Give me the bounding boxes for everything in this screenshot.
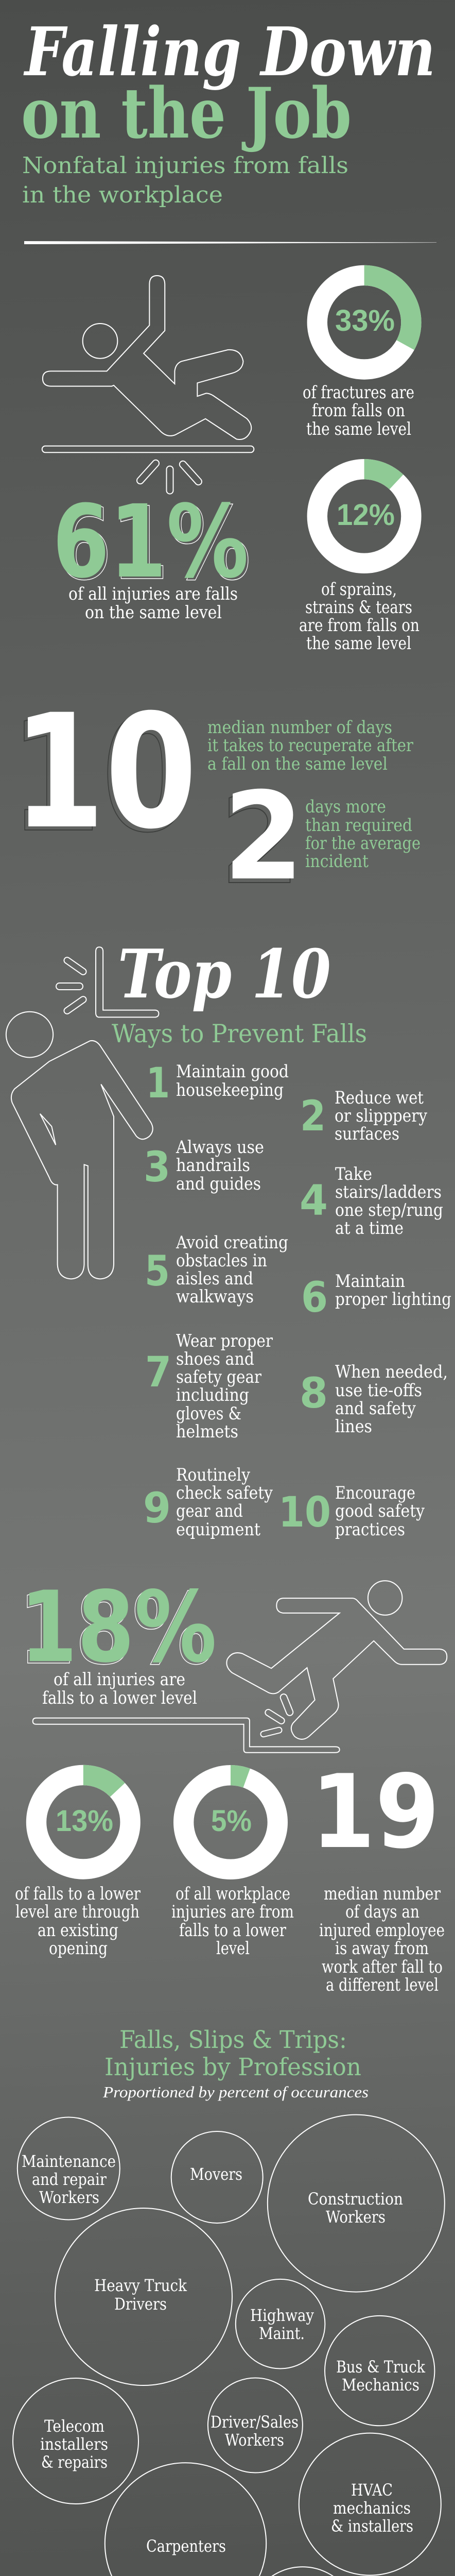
tip 9: 9	[143, 1484, 171, 1533]
tip 3: Always use	[176, 1137, 264, 1158]
tip 6: Maintain	[335, 1271, 405, 1292]
heading: injuries by profession: Falls, Slips & Trips:	[119, 2026, 347, 2054]
icon: head impact ticks	[56, 956, 87, 1015]
bubble: construction: Workers	[326, 2207, 386, 2227]
donut: 33%	[317, 275, 411, 369]
bubble: highway: Highway	[250, 2306, 314, 2325]
tip 10: 10	[278, 1488, 331, 1537]
caption: fractures	[303, 382, 414, 439]
bubble: carpenters: Carpenters	[146, 2536, 226, 2556]
heading: injuries by profession	[104, 2026, 361, 2081]
bubble: telecom: Telecom	[44, 2416, 104, 2436]
bubble: hvac: & installers	[331, 2516, 413, 2536]
bubble: construction: Construction	[308, 2189, 403, 2209]
caption: lower level: of all injuries are	[54, 1669, 185, 1690]
bubble: construction	[268, 2115, 445, 2292]
tip 6: 6	[301, 1274, 328, 1322]
tip 7: 7	[145, 1348, 171, 1397]
tip 8: lines	[335, 1416, 372, 1437]
bubble: maintenance: Maintenance	[22, 2151, 116, 2171]
bubble: bus and truck: Mechanics	[342, 2375, 419, 2395]
donut: 33%: 33%	[335, 304, 395, 337]
donut: 13%: 13%	[56, 1804, 113, 1838]
stat: 2: 2	[220, 771, 300, 911]
icon: person slipping	[42, 276, 254, 452]
tip 3: 3	[144, 1143, 170, 1192]
caption: sprains: of sprains,	[321, 579, 397, 600]
bubble: heavy truck: Drivers	[114, 2294, 167, 2314]
icon: person falling off step	[33, 1581, 447, 1753]
icon: step impact ticks	[260, 1693, 294, 1737]
bubble: bus drivers	[248, 2567, 357, 2576]
tip 7: safety gear	[176, 1367, 262, 1387]
tip 7: helmets	[176, 1421, 238, 1442]
tip 7: including	[176, 1385, 249, 1405]
donut: 12%	[317, 469, 411, 563]
bubble: driver sales: Driver/Sales	[211, 2412, 299, 2432]
tip 5: walkways	[176, 1286, 254, 1307]
caption: lower level	[42, 1669, 197, 1708]
tip 10	[278, 1483, 425, 1540]
caption: sprains	[299, 579, 419, 654]
caption: workplace injuries: injuries are from	[171, 1902, 294, 1922]
tip 4	[300, 1164, 443, 1239]
caption: median days away: is away from	[335, 1938, 429, 1959]
caption: workplace injuries: of all workplace	[176, 1884, 290, 1904]
bubble: maintenance	[18, 2117, 120, 2219]
tip 9: gear and	[176, 1501, 243, 1521]
subtitle: Nonfatal injuries from falls	[22, 152, 348, 179]
tip 4: one step/rung	[335, 1200, 443, 1221]
tip 2: surfaces	[335, 1124, 399, 1144]
subheading: Ways to Prevent Falls: Ways to Prevent Falls	[112, 1019, 367, 1048]
list: top 10 tips	[143, 1059, 451, 1540]
tip 8	[300, 1362, 448, 1437]
icon: person hitting wall	[6, 1012, 153, 1279]
bubble: hvac: HVAC	[351, 2480, 393, 2500]
stat: 2: 2	[223, 767, 304, 907]
tip 5	[145, 1232, 288, 1307]
tip 10: Encourage	[335, 1483, 415, 1503]
tip 4: 4	[300, 1177, 328, 1225]
bubble: driver sales	[208, 2378, 303, 2473]
tip 7: Wear proper	[176, 1331, 273, 1351]
stat: 61%: 61%	[52, 483, 249, 600]
tip 2: or slipppery	[335, 1106, 428, 1126]
caption: existing opening	[15, 1884, 141, 1959]
tip 1: 1	[146, 1059, 170, 1108]
caption: workplace injuries: level	[216, 1938, 250, 1959]
bubble: movers	[171, 2131, 263, 2223]
tip 10: good safety	[335, 1501, 425, 1521]
tip 4: Take	[335, 1164, 372, 1184]
icon: impact ticks	[135, 459, 203, 494]
tip 2: Reduce wet	[335, 1088, 424, 1108]
caption: fractures: of fractures are	[303, 382, 414, 403]
caption: lower level: falls to a lower level	[42, 1688, 197, 1708]
caption: all injuries: on the same level	[85, 602, 222, 623]
caption: days more: for the average	[305, 833, 421, 854]
tip 5: obstacles in	[176, 1250, 267, 1271]
tip 9: check safety	[176, 1483, 273, 1503]
tip 9	[143, 1465, 273, 1540]
tip 3	[144, 1137, 264, 1194]
tip 5: 5	[145, 1247, 170, 1296]
stat: 19: 19	[311, 1753, 440, 1871]
subtitle	[22, 152, 348, 208]
tip 6	[301, 1271, 451, 1322]
caption: median days: a fall on the same level	[207, 754, 388, 774]
caption: sprains: the same level	[306, 633, 411, 654]
caption: median days away	[319, 1884, 445, 1995]
stat: 61%: 61%	[55, 485, 251, 602]
tip 2	[300, 1088, 428, 1144]
subtitle: in the workplace	[22, 182, 223, 208]
bubble: heavy truck: Heavy Truck	[94, 2276, 187, 2295]
caption: sprains: strains & tears	[305, 597, 412, 618]
tip 1: Maintain good	[176, 1061, 289, 1082]
tip 8: use tie-offs	[335, 1380, 422, 1401]
caption: days more: than required	[305, 815, 412, 836]
bubble: maintenance: Workers	[39, 2188, 99, 2207]
bubble: carpenters	[105, 2463, 266, 2576]
donut: 13%	[36, 1775, 130, 1869]
tip 3: and guides	[176, 1174, 261, 1194]
caption: sprains: are from falls on	[299, 615, 419, 636]
tip 1	[146, 1059, 289, 1108]
tip 8: 8	[300, 1369, 328, 1418]
stat: 10: 10	[9, 684, 194, 867]
tip 7: shoes and	[176, 1349, 254, 1369]
caption: existing opening: of falls to a lower	[15, 1884, 141, 1904]
caption: days more: incident	[305, 851, 369, 872]
caption: existing opening: an existing	[38, 1920, 118, 1941]
bubble: movers: Movers	[190, 2164, 242, 2184]
donut: 5%: 5%	[211, 1804, 252, 1838]
caption: existing opening: level are through	[15, 1902, 139, 1922]
bubble: highway: Maint.	[259, 2324, 305, 2343]
tip 4: stairs/ladders	[335, 1182, 442, 1202]
tip 9: Routinely	[176, 1465, 251, 1485]
donut: 12%: 12%	[337, 498, 395, 532]
caption: median days: it takes to recuperate after	[207, 735, 414, 756]
caption: days more: days more	[305, 796, 386, 817]
caption: existing opening: opening	[49, 1938, 108, 1959]
tip 8: and safety	[335, 1398, 416, 1419]
heading: Top 10: Top 10	[118, 935, 331, 1013]
caption: median days: median number of days	[207, 717, 392, 738]
caption: fractures: the same level	[306, 419, 411, 439]
caption: median days	[207, 717, 414, 774]
caption: fractures: from falls on	[312, 400, 405, 421]
caption: all injuries: of all injuries are falls	[68, 584, 238, 604]
caption: median days away: of days an	[345, 1902, 419, 1922]
caption: workplace injuries: falls to a lower	[179, 1920, 287, 1941]
bubble: driver sales: Workers	[225, 2430, 284, 2450]
bubble: hvac: mechanics	[333, 2498, 411, 2518]
tip 1: housekeeping	[176, 1080, 284, 1100]
stat: 18%: 18%	[18, 1572, 215, 1686]
caption: workplace injuries	[171, 1884, 294, 1959]
caption: all injuries	[68, 584, 238, 623]
tip 2: 2	[300, 1092, 326, 1141]
tip 4: at a time	[335, 1218, 404, 1239]
bubble: hvac	[299, 2433, 441, 2575]
tip 9: equipment	[176, 1519, 260, 1540]
bubble: highway	[236, 2279, 325, 2369]
tip 5: aisles and	[176, 1268, 253, 1289]
bubble chart: professions	[13, 2115, 445, 2576]
tip 7: gloves &	[176, 1403, 241, 1424]
stat: 18%: 18%	[20, 1570, 217, 1684]
tip 3: handrails	[176, 1155, 250, 1176]
bubble: telecom: & repairs	[41, 2452, 108, 2472]
heading: injuries by profession: Injuries by Profession	[104, 2053, 361, 2081]
bubble: maintenance: and repair	[32, 2170, 107, 2189]
bubble: bus and truck: Bus & Truck	[336, 2357, 426, 2377]
donut: 5%	[184, 1775, 277, 1869]
caption: days more	[305, 796, 421, 872]
stat: 10: 10	[13, 681, 197, 863]
tip 5: Avoid creating	[176, 1232, 288, 1253]
tip 10: practices	[335, 1519, 405, 1540]
tip 7	[145, 1331, 273, 1442]
title: on the Job: on the Job	[21, 72, 352, 154]
title block	[21, 12, 435, 208]
bubble: telecom: installers	[40, 2434, 108, 2454]
bubble: bus and truck	[325, 2316, 434, 2426]
subheading: proportioned: Proportioned by percent of occurances	[102, 2083, 369, 2101]
bubble: telecom	[13, 2378, 138, 2504]
icon: wall	[96, 947, 159, 1017]
bubble: heavy truck	[55, 2208, 232, 2385]
